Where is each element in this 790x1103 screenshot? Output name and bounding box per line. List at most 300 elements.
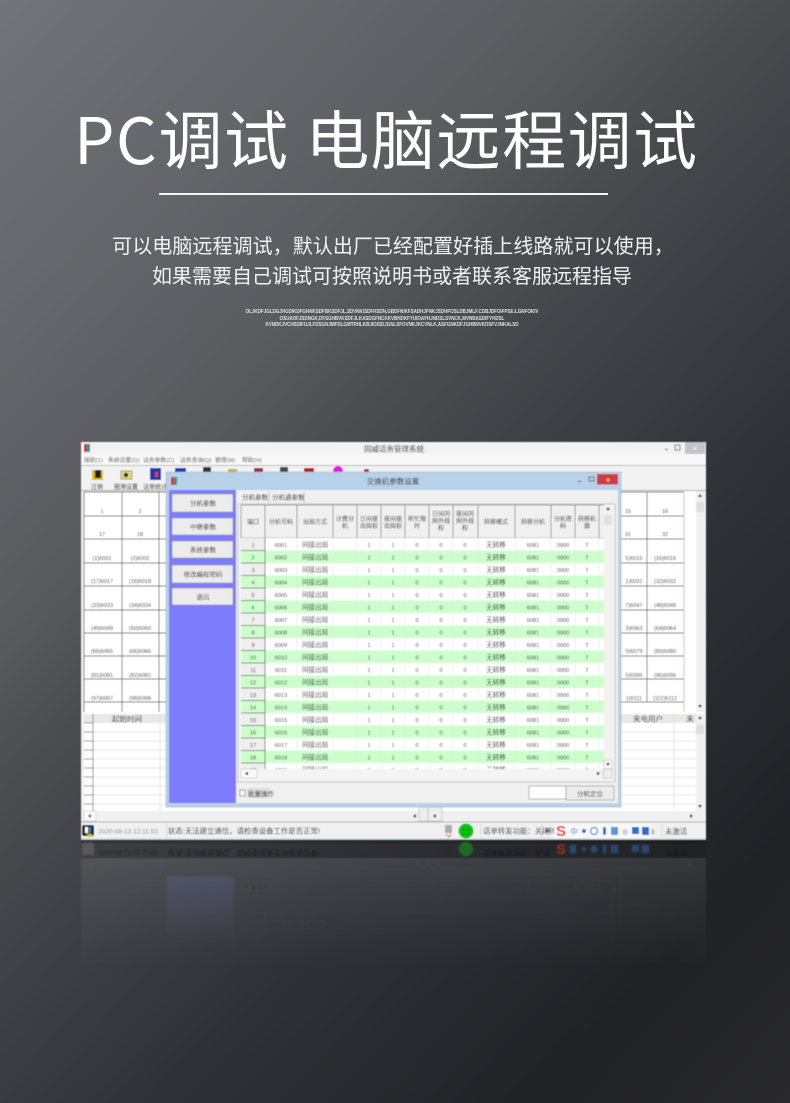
parameter table header: 权 <box>438 524 444 532</box>
status bar: 3 <box>651 830 655 836</box>
parameter table rows: 无转移 <box>486 640 506 649</box>
status bar <box>81 822 706 840</box>
parameter table rows: 13 <box>250 693 256 699</box>
reflected status bar: 状态:无法建立通信，请检查设备工作是否正常! <box>168 848 320 857</box>
extension grid right: (112)6112 <box>653 696 677 702</box>
parameter table rows: 1 <box>367 768 371 774</box>
parameter table rows: 0 <box>463 593 467 599</box>
parameter table rows: T <box>585 580 589 586</box>
button: programming <box>172 565 233 583</box>
parameter table rows: 1 <box>367 680 371 686</box>
status bar: 状态:无法建立通信，请检查设备工作是否正常! <box>168 826 320 836</box>
button: exit <box>172 588 233 605</box>
parameter table rows: T <box>585 768 589 774</box>
parameter table rows: 1 <box>391 543 395 549</box>
extension locate input <box>529 786 566 799</box>
parameter table rows: T <box>585 706 589 712</box>
parameter table rows: 间接出局 <box>302 628 329 636</box>
extension grid right: (96)6096 <box>654 673 676 679</box>
menu bar <box>81 454 706 466</box>
parameter table rows: 6081 <box>527 706 539 712</box>
extension grid left: 1 <box>100 509 104 515</box>
dialog title bar: × <box>606 478 610 484</box>
parameter table rows: 间接出局 <box>302 602 329 612</box>
icon: settings <box>114 471 138 491</box>
parameter table rows: 1 <box>391 568 395 574</box>
parameter table rows: 6019 <box>275 768 287 774</box>
parameter table rows: 6015 <box>275 718 287 724</box>
menu bar: 管理(M) <box>215 456 235 464</box>
parameter table header: 日间同 <box>432 510 450 518</box>
parameter table rows: 0 <box>463 693 467 699</box>
reflected dialog text: 18 <box>252 922 259 928</box>
reflected sidebar <box>167 877 234 952</box>
parameter table rows: 1 <box>367 668 371 674</box>
parameter table header: 出局权 <box>384 522 402 530</box>
parameter table rows: 6014 <box>275 706 287 712</box>
parameter table rows: 无转移 <box>486 652 506 662</box>
parameter table rows: 0 <box>415 593 419 599</box>
top scrollbar <box>696 491 704 712</box>
extension grid left: (81)6081 <box>91 673 113 679</box>
parameter table rows: 6011 <box>275 668 287 674</box>
parameter table header: 出局方式 <box>303 518 327 526</box>
parameter table rows: 6006 <box>275 606 287 612</box>
reflected status bar: 2020-08-13 12:11:53 <box>98 848 158 855</box>
batch checkbox <box>240 788 274 798</box>
toolbar <box>81 466 706 491</box>
parameter table rows: 0 <box>463 743 467 749</box>
parameter table rows: 1 <box>391 606 395 612</box>
parameter table header: 日间拨 <box>360 515 378 523</box>
parameter table rows: 3 <box>251 568 255 574</box>
tabs: 分机通参数 <box>272 492 305 502</box>
parameter table rows: 6009 <box>275 643 287 649</box>
button: trunk: 中继参数 <box>190 522 216 531</box>
extension grid right: 1)6111 <box>626 696 642 702</box>
extension grid left: (2)6002 <box>131 556 149 562</box>
parameter table rows: 6003 <box>275 568 287 574</box>
parameter table header: 转移模式 <box>484 518 508 526</box>
parameter table rows: 6081 <box>527 593 539 599</box>
parameter table rows: 间接出局 <box>302 540 329 549</box>
dialog window <box>166 472 621 807</box>
icon: printer <box>445 825 452 837</box>
parameter table rows: 无转移 <box>486 715 506 724</box>
parameter table rows: 1 <box>391 630 395 636</box>
parameter table rows: 无转移 <box>486 752 506 762</box>
extension grid left: (65)6065 <box>91 649 113 655</box>
description text: 如果需要自己调试可按照说明书或者联系客服远程指导 <box>152 266 632 288</box>
parameter table rows: 间接出局 <box>302 565 329 574</box>
parameter table rows: 间接出局 <box>302 678 329 686</box>
reflected dialog text: 批量操作 <box>243 883 271 892</box>
parameter table header: 听忙限 <box>408 515 426 523</box>
parameter table rows: T <box>585 743 589 749</box>
parameter table rows: 1 <box>367 643 371 649</box>
parameter table rows: 0 <box>463 680 467 686</box>
parameter table header: 器 <box>584 523 590 530</box>
button: system <box>172 541 233 558</box>
parameter table rows: 0 <box>439 668 443 674</box>
parameter table rows: 0 <box>415 543 419 549</box>
parameter table rows: 0 <box>415 756 419 762</box>
parameter table rows: 间接出局 <box>302 752 329 762</box>
parameter table rows: 1 <box>367 693 371 699</box>
parameter table rows: 无转移 <box>486 602 506 612</box>
icon: phone status <box>82 825 94 837</box>
parameter table rows: 0 <box>463 668 467 674</box>
small decorative English text: OLJKDFJGLDGJHGDIKDFGHNKSDFBKSDFJL,SDVNKISDFHSDN,GBDFNIKFSADHJFNKJSDHFOSLDBJMLF.CDBJDFOIFPSE;LGNFOKIV <box>246 309 538 315</box>
parameter table rows <box>241 538 604 776</box>
reflected status bar: 话单转发功能：关闭 <box>483 848 550 857</box>
parameter table rows: 1 <box>391 756 395 762</box>
parameter table rows: T <box>585 730 589 736</box>
parameter table header: 出局权 <box>360 522 378 530</box>
parameter table rows: 6018 <box>275 756 287 762</box>
parameter table rows: 6081 <box>527 756 539 762</box>
parameter table rows: 间接出局 <box>302 590 329 599</box>
parameter table rows: T <box>585 556 589 562</box>
parameter table rows: 6081 <box>527 543 539 549</box>
small decorative English text: KVNDKJVCHSDIFUJLFDSGNJMFDLGMTRHLKBJIOISDJGNLSFOVNKJKCVNLK,ASFGNKDFJGHBNVKDSFVJNKALSD <box>265 322 519 328</box>
parameter table rows: T <box>585 656 589 662</box>
parameter table rows: 间接出局 <box>302 552 329 562</box>
parameter table rows: 0000 <box>557 606 569 612</box>
parameter table rows: 1 <box>367 568 371 574</box>
parameter table rows: 1 <box>367 593 371 599</box>
parameter table rows: 0 <box>463 543 467 549</box>
parameter table rows: T <box>585 630 589 636</box>
extension grid left: (50)6050 <box>129 626 151 632</box>
locate button <box>566 786 614 800</box>
call log table: 起始时间 <box>112 714 142 724</box>
parameter table rows: 6081 <box>527 580 539 586</box>
parameter table header: 转移分机 <box>521 518 545 526</box>
extension grid right: (64)6064 <box>654 626 676 632</box>
parameter table rows: T <box>585 718 589 724</box>
parameter table rows: 1 <box>367 618 371 624</box>
toolbar icons row <box>175 466 369 476</box>
parameter table rows: T <box>585 756 589 762</box>
parameter table rows: 14 <box>250 706 256 712</box>
parameter table rows: 0 <box>415 656 419 662</box>
parameter table rows: 1 <box>391 580 395 586</box>
parameter table rows: 无转移 <box>486 690 506 699</box>
parameter table rows: 0 <box>415 568 419 574</box>
icon: Sogou input bar: 中 <box>570 826 578 836</box>
extension grid left: (33)6033 <box>91 603 113 609</box>
extension grid right: 31 <box>625 532 631 538</box>
parameter table rows: 0 <box>439 743 443 749</box>
parameter table rows: 0 <box>463 618 467 624</box>
parameter table rows: 1 <box>391 743 395 749</box>
parameter table rows: 间接出局 <box>302 690 329 699</box>
parameter table rows: 0 <box>439 643 443 649</box>
extension grid left: (18)6018 <box>129 579 151 585</box>
title: PC调试 电脑远程调试 <box>74 91 699 183</box>
tabs: 分机参数 <box>242 492 268 502</box>
parameter table rows: 0 <box>439 680 443 686</box>
parameter table rows: 0 <box>463 706 467 712</box>
dialog content background <box>169 490 618 803</box>
extension grid left: (34)6034 <box>129 603 151 609</box>
extension grid right: 3)6063 <box>625 626 643 632</box>
call log table <box>84 712 704 811</box>
parameter table header: 网外线 <box>456 517 474 525</box>
parameter table rows: 0 <box>439 556 443 562</box>
parameter table rows: 1 <box>391 556 395 562</box>
icon: statistics <box>143 468 167 491</box>
parameter table rows: 6005 <box>275 593 287 599</box>
button: trunk <box>172 518 233 535</box>
parameter table rows: 1 <box>367 743 371 749</box>
icon: statistics: 话单统计 <box>143 483 167 491</box>
parameter table rows: 1 <box>367 656 371 662</box>
parameter table rows: 0 <box>415 768 419 774</box>
parameter table rows: 6081 <box>527 768 539 774</box>
batch checkbox: 批量操作 <box>248 789 274 798</box>
parameter table rows: 0 <box>415 730 419 736</box>
reflection of software window <box>81 840 706 965</box>
parameter table rows: 0 <box>439 756 443 762</box>
parameter table rows: 无转移 <box>486 540 506 549</box>
parameter table rows: 6012 <box>275 680 287 686</box>
extension grid right <box>621 491 697 712</box>
dialog title bar: 交换机参数设置 <box>367 476 420 486</box>
parameter table rows: 0 <box>463 768 467 774</box>
parameter table rows: 12 <box>250 680 256 686</box>
parameter table rows: 1 <box>367 730 371 736</box>
parameter table rows: 1 <box>367 580 371 586</box>
menu bar: 话务参数(C) <box>143 456 174 464</box>
extension grid left: (82)6082 <box>129 673 151 679</box>
parameter table rows: 0 <box>439 593 443 599</box>
parameter table rows: T <box>585 643 589 649</box>
parameter table rows: 1 <box>391 693 395 699</box>
parameter table rows: 1 <box>391 593 395 599</box>
parameter table frame <box>238 504 615 782</box>
parameter table rows: 间接出局 <box>302 702 329 712</box>
parameter table rows: 19 <box>250 768 256 774</box>
icon: green smiley <box>458 824 474 838</box>
parameter table header: 权 <box>462 524 468 532</box>
reflected status bar: 未激活 <box>665 848 688 857</box>
parameter table rows: 无转移 <box>486 728 506 736</box>
parameter table rows: 0 <box>439 543 443 549</box>
extension grid left: (49)6049 <box>91 626 113 632</box>
parameter table rows: 0 <box>439 618 443 624</box>
button: system: 系统参数 <box>190 545 216 554</box>
parameter table rows: 6081 <box>527 743 539 749</box>
parameter table rows: 无转移 <box>486 740 506 749</box>
icon: settings: 圈港设置 <box>114 483 138 491</box>
parameter table rows: 间接出局 <box>302 640 329 649</box>
parameter table rows: 6081 <box>527 568 539 574</box>
parameter table rows: 7 <box>251 618 255 624</box>
parameter table rows: 0000 <box>557 580 569 586</box>
parameter table rows: 0 <box>439 730 443 736</box>
parameter table rows: 0 <box>415 643 419 649</box>
parameter table rows: T <box>585 668 589 674</box>
parameter table rows: 6081 <box>527 618 539 624</box>
menu bar: 系统设置(G) <box>108 456 140 464</box>
extension grid left: 18 <box>137 532 143 538</box>
extension grid left <box>84 491 167 712</box>
parameter table rows: 6013 <box>275 693 287 699</box>
parameter table rows: 0 <box>463 630 467 636</box>
locate button: 分机定位 <box>577 789 604 798</box>
menu bar: 帮助(H) <box>242 456 262 464</box>
parameter table rows: 1 <box>391 618 395 624</box>
parameter table rows: 6081 <box>527 718 539 724</box>
parameter table rows: 0 <box>439 656 443 662</box>
parameter table rows: T <box>585 606 589 612</box>
extension grid left: (1)6001 <box>93 556 111 562</box>
parameter table rows: T <box>585 593 589 599</box>
parameter table rows: 无转移 <box>486 678 506 686</box>
parameter table rows: T <box>585 693 589 699</box>
parameter table rows: 6002 <box>275 556 287 562</box>
extension grid right: (80)6080 <box>654 649 676 655</box>
parameter table rows: 6001 <box>275 543 287 549</box>
button: extension: 分机参数 <box>190 498 216 508</box>
parameter table rows: 间接出局 <box>302 728 329 736</box>
menu bar: 接助(1) <box>84 456 103 464</box>
parameter table rows: 0000 <box>557 718 569 724</box>
parameter table header: 夜间同 <box>456 510 474 518</box>
dialog title bar <box>171 474 618 486</box>
tabs <box>242 492 305 503</box>
parameter table rows: 0000 <box>557 618 569 624</box>
parameter table rows: 15 <box>250 718 256 724</box>
parameter table rows: 间接出局 <box>302 652 329 662</box>
extension grid right: 15 <box>625 509 631 515</box>
parameter table rows: 0 <box>415 618 419 624</box>
parameter table header: 转移机 <box>578 515 596 523</box>
parameter table header: 分机密 <box>554 515 572 523</box>
parameter table rows: 1 <box>367 706 371 712</box>
parameter table rows: 0 <box>415 630 419 636</box>
description text <box>112 236 674 288</box>
parameter table rows: 6010 <box>275 656 287 662</box>
parameter table rows: 0 <box>415 718 419 724</box>
parameter table rows: 0000 <box>557 706 569 712</box>
parameter table rows: 0 <box>415 668 419 674</box>
parameter table rows: 1 <box>391 680 395 686</box>
window title bar: 国威话务管理系统 <box>364 444 424 454</box>
parameter table rows: 无转移 <box>486 615 506 624</box>
parameter table rows: 1 <box>391 668 395 674</box>
parameter table rows: 17 <box>250 743 256 749</box>
parameter table rows: 6 <box>251 606 255 612</box>
parameter table rows: 2 <box>251 556 255 562</box>
parameter table rows: 6017 <box>275 743 287 749</box>
parameter table rows: 0 <box>439 568 443 574</box>
parameter table rows: 0 <box>463 756 467 762</box>
parameter table rows: 6081 <box>527 656 539 662</box>
reflection glow <box>81 858 706 965</box>
description text: 可以电脑远程调试，默认出厂已经配置好插上线路就可以使用， <box>112 236 674 258</box>
parameter table rows: 无转移 <box>486 702 506 712</box>
parameter table rows: 0 <box>415 606 419 612</box>
parameter table rows: 0000 <box>557 656 569 662</box>
parameter table header: 码 <box>560 522 566 530</box>
extension grid right: 9)6079 <box>625 649 643 655</box>
extension grid right: (16)6016 <box>654 556 676 562</box>
extension grid right: 1)6031 <box>625 579 643 585</box>
parameter table rows: T <box>585 568 589 574</box>
status bar: 话单转发功能：关闭 <box>483 826 550 836</box>
parameter table rows: 6081 <box>527 556 539 562</box>
parameter table header: 机 <box>342 522 348 530</box>
small decorative English text: OSUAOFJSDNGK,DFSGHBVKSDFJLKASDGFNCKKVBHDKFYUIOAFHJNDSLSVNCK,MVNBASDIFYHDSL <box>280 316 504 322</box>
parameter table rows: 0 <box>463 580 467 586</box>
parameter table rows: 0000 <box>557 743 569 749</box>
parameter table rows: 1 <box>391 656 395 662</box>
icon: logout: 注销 <box>91 483 103 491</box>
parameter table rows: 0 <box>463 656 467 662</box>
parameter table rows: 0000 <box>557 768 569 774</box>
parameter table rows: 6081 <box>527 680 539 686</box>
reflected status bar <box>81 840 706 858</box>
button: extension <box>172 494 233 512</box>
reflected dialog text <box>243 883 601 928</box>
parameter table header <box>241 505 604 538</box>
parameter table rows: 0000 <box>557 693 569 699</box>
parameter table rows: 0 <box>463 606 467 612</box>
parameter table rows: 0000 <box>557 593 569 599</box>
extension grid right: 5)6095 <box>625 673 643 679</box>
parameter table rows: 10 <box>250 656 256 662</box>
parameter table rows: 16 <box>250 730 256 736</box>
parameter table rows: T <box>585 618 589 624</box>
parameter table rows: 6007 <box>275 618 287 624</box>
parameter table rows: 0000 <box>557 568 569 574</box>
parameter table rows: 0000 <box>557 680 569 686</box>
parameter table rows: 0 <box>439 606 443 612</box>
parameter table rows: 0000 <box>557 756 569 762</box>
icon: Sogou input bar <box>554 823 651 840</box>
parameter table rows: 1 <box>367 718 371 724</box>
parameter table header: 端口 <box>247 518 259 526</box>
parameter table rows: 6081 <box>527 643 539 649</box>
call log table: 来电用户 <box>633 714 663 724</box>
parameter table rows: 1 <box>391 706 395 712</box>
parameter table rows: 间接出局 <box>302 765 329 774</box>
parameter table rows: 6081 <box>527 606 539 612</box>
extension grid right: 7)6047 <box>625 603 643 609</box>
menu bar: 话务查询(Q) <box>180 456 212 464</box>
extension grid left: (17)6017 <box>91 579 113 585</box>
parameter table rows: 0000 <box>557 543 569 549</box>
extension grid right: 5)6015 <box>625 556 643 562</box>
reflected status bar: S <box>556 841 566 857</box>
parameter table rows: 1 <box>367 606 371 612</box>
window title bar <box>81 442 706 454</box>
parameter table rows: 0 <box>463 730 467 736</box>
parameter table rows: 0 <box>439 630 443 636</box>
parameter table rows: 1 <box>367 543 371 549</box>
status bar: 未激活 <box>665 827 688 836</box>
parameter table rows: 0 <box>463 643 467 649</box>
small decorative English text <box>246 309 538 328</box>
parameter table rows: 无转移 <box>486 765 506 774</box>
parameter table rows: 0 <box>439 693 443 699</box>
parameter table rows: 0000 <box>557 668 569 674</box>
parameter table rows: 8 <box>251 630 255 636</box>
call log table: 来 <box>686 714 694 724</box>
